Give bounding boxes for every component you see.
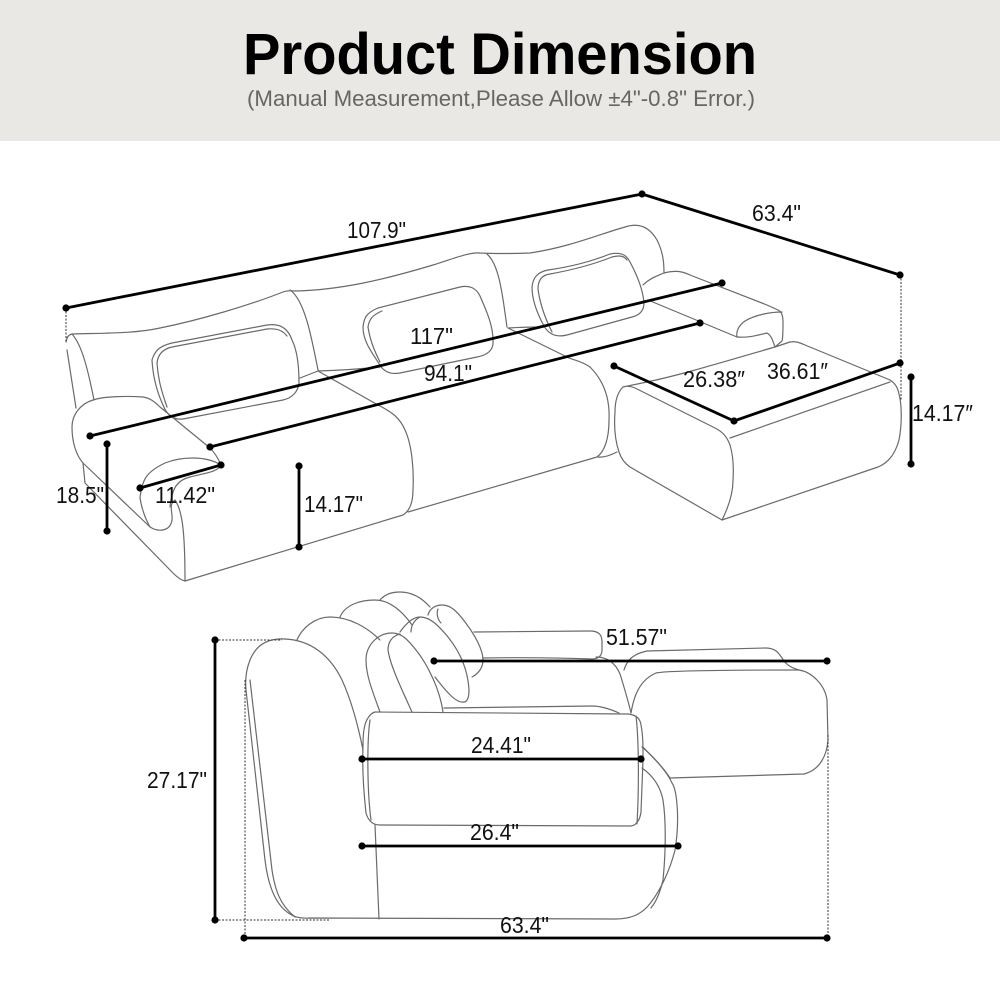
- ottoman: [615, 342, 901, 520]
- dimension labels: side view: 63.4": [500, 912, 549, 938]
- dimension labels: perspective view: 14.17": [304, 491, 363, 517]
- back pillows: [297, 617, 380, 640]
- overall length line: [66, 194, 900, 308]
- measure lines: [215, 640, 827, 938]
- sofa side view drawing: [246, 592, 828, 919]
- dimension labels: perspective view: 117": [410, 323, 453, 349]
- dimension labels: side view: [147, 624, 667, 938]
- dimension labels: perspective view: 36.61″: [767, 358, 828, 384]
- dashed guides: [66, 275, 901, 400]
- back cushions outline: [66, 225, 664, 342]
- dimension lines: perspective view: [62, 190, 915, 551]
- end dots: [211, 636, 831, 942]
- subtitle: (Manual Measurement,Please Allow ±4"-0.8" Error.): [247, 86, 755, 111]
- chaise: [624, 648, 828, 778]
- dimension labels: perspective view: 14.17″: [912, 400, 973, 426]
- seat cushion: [363, 712, 643, 826]
- header band: [0, 0, 1000, 141]
- sofa perspective drawing: [66, 225, 901, 581]
- dimension labels: perspective view: 63.4": [752, 200, 801, 226]
- dimension labels: side view: 24.41": [471, 732, 531, 758]
- dimension labels: perspective view: 18.5": [56, 482, 104, 508]
- dimension lines: side view: [211, 636, 831, 942]
- title: Product Dimension: [243, 22, 757, 87]
- right armrest: [643, 271, 783, 347]
- dimension labels: perspective view: 94.1": [424, 360, 472, 386]
- dimension labels: side view: 27.17": [147, 767, 207, 793]
- pillows: [152, 325, 299, 419]
- dimension labels: perspective view: 107.9": [347, 217, 406, 243]
- main arm body: [246, 639, 678, 919]
- dashed guides: [215, 640, 828, 938]
- dimension labels: perspective view: 11.42": [155, 482, 215, 508]
- dimension labels: perspective view: [56, 200, 973, 517]
- dimension labels: side view: 26.4": [470, 819, 519, 845]
- dimension labels: side view: 51.57": [606, 624, 667, 650]
- seats: [185, 371, 413, 581]
- seat length lines: [90, 283, 911, 547]
- dimension labels: perspective view: 26.38″: [683, 366, 745, 392]
- end dots: [62, 190, 915, 551]
- far armrest: [474, 631, 602, 659]
- left armrest: [93, 396, 221, 465]
